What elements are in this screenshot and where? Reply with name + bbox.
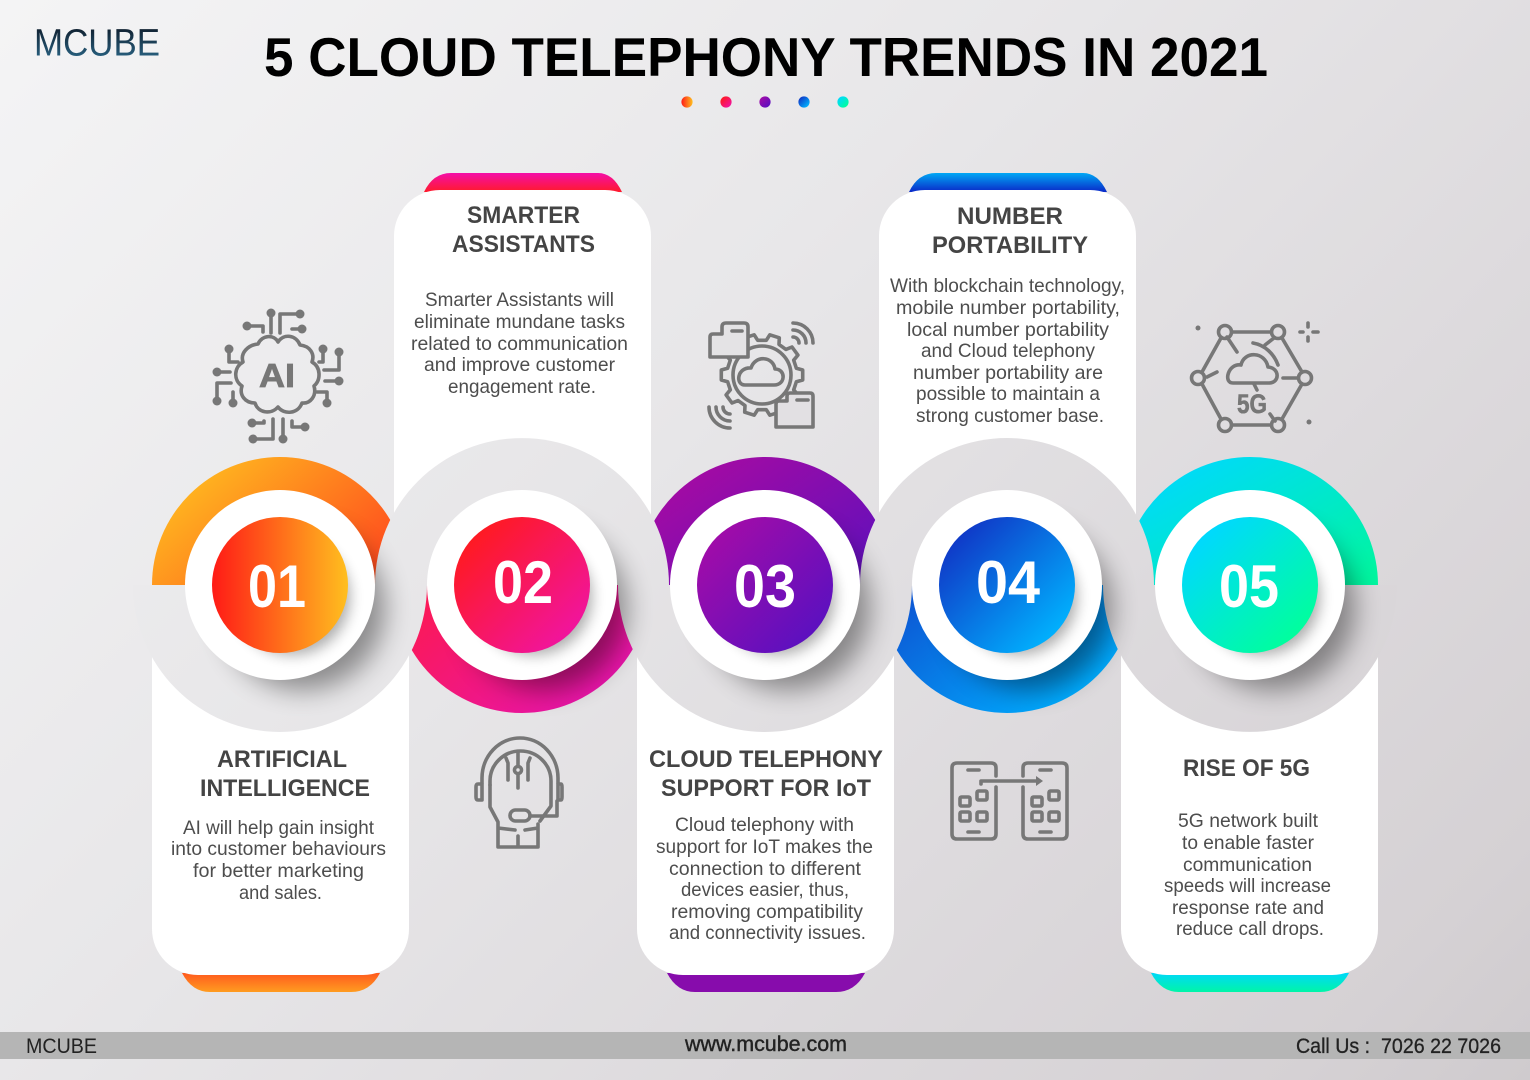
footer bar [0, 1032, 1530, 1059]
panel: cloud telephony support for IoT [637, 585, 894, 992]
text: artificial intelligence body: into customer behaviours [171, 838, 386, 860]
heading: rise of 5G: RISE OF 5G [1183, 755, 1310, 782]
text: cloud telephony body: removing compatibility [671, 901, 863, 923]
text: rise of 5G body: 5G network built [1178, 810, 1319, 832]
text: rise of 5G body [1164, 810, 1331, 940]
node 04: 04 [976, 549, 1041, 616]
text: cloud telephony body: support for IoT makes the [656, 836, 873, 858]
icon: cloud gear [709, 323, 813, 428]
heading: number portability: PORTABILITY [932, 232, 1088, 259]
coloured arcs [152, 457, 1378, 713]
node 01: 01 [248, 553, 306, 620]
text: number portability body: strong customer base. [916, 405, 1104, 427]
panel: rise of 5G [1121, 585, 1378, 992]
text: cloud telephony body: and connectivity issues. [669, 922, 866, 944]
icon: AI brain: AI [259, 357, 295, 394]
panel: smarter assistants [394, 173, 651, 585]
text: number portability body: With blockchain technology, [890, 275, 1125, 297]
text: artificial intelligence body: and sales. [239, 882, 322, 904]
footer: phone: Call Us : 7026 22 7026 [1296, 1035, 1501, 1058]
logo: MCUBE: MCUBE [34, 22, 160, 64]
icon: 5G network [1192, 323, 1318, 432]
text: cloud telephony body: devices easier, thus, [681, 879, 849, 901]
node 05: 05 [1219, 553, 1279, 620]
text: number portability body: mobile number portability, [896, 297, 1120, 319]
text: rise of 5G body: reduce call drops. [1176, 918, 1324, 940]
icon: phones number transfer [952, 763, 1067, 839]
text: smarter assistants body: engagement rate. [448, 376, 596, 398]
text: rise of 5G body: to enable faster [1182, 832, 1314, 854]
text: number portability body: and Cloud telephony [921, 340, 1095, 362]
heading: artificial intelligence [200, 746, 370, 802]
text: smarter assistants body: and improve customer [424, 354, 615, 376]
text: cloud telephony body [656, 814, 873, 944]
text: rise of 5G body: response rate and [1172, 897, 1324, 919]
text: number portability body: number portability are [913, 362, 1103, 384]
text: smarter assistants body: Smarter Assistants will [425, 289, 614, 311]
node 02: 02 [493, 549, 553, 616]
heading: number portability [932, 203, 1088, 259]
icon: 5G network: 5G [1237, 389, 1267, 419]
text: smarter assistants body: eliminate mundane tasks [414, 311, 625, 333]
text: smarter assistants body: related to communication [411, 333, 628, 355]
panel: artificial intelligence [152, 585, 409, 992]
text: cloud telephony body: Cloud telephony with [675, 814, 854, 836]
text: smarter assistants body [411, 289, 628, 398]
title: 5 CLOUD TELEPHONY TRENDS IN 2021 [264, 26, 1268, 88]
node 03: 03 [734, 553, 796, 620]
node 05 [1155, 490, 1355, 690]
heading: smarter assistants [452, 202, 595, 258]
node 02 [427, 490, 627, 690]
heading: cloud telephony support for IoT [649, 746, 883, 802]
text: cloud telephony body: connection to different [669, 858, 862, 880]
text: rise of 5G body: communication [1183, 854, 1312, 876]
node 01 [185, 490, 385, 690]
heading: cloud telephony support for IoT: SUPPORT FOR IoT [661, 775, 871, 802]
footer: website: www.mcube.com [684, 1033, 847, 1056]
icon: headset agent [476, 738, 562, 847]
text: artificial intelligence body: for better marketing [193, 860, 364, 882]
text: artificial intelligence body [171, 817, 386, 904]
panel: number portability [879, 173, 1136, 585]
icon: AI brain [212, 308, 344, 444]
text: number portability body [890, 275, 1125, 427]
heading: artificial intelligence: ARTIFICIAL [217, 746, 347, 773]
heading: cloud telephony support for IoT: CLOUD TELEPHONY [649, 746, 883, 773]
footer: brand: MCUBE [26, 1035, 97, 1058]
text: artificial intelligence body: AI will help gain insight [183, 817, 375, 839]
heading: smarter assistants: ASSISTANTS [452, 231, 595, 258]
title dots [681, 96, 849, 108]
node 03 [670, 490, 870, 690]
grey halos [133, 438, 1397, 732]
text: number portability body: possible to maintain a [916, 383, 1100, 405]
text: rise of 5G body: speeds will increase [1164, 875, 1331, 897]
heading: smarter assistants: SMARTER [467, 202, 580, 229]
text: number portability body: local number portability [907, 319, 1109, 341]
heading: number portability: NUMBER [957, 203, 1063, 230]
node 04 [912, 490, 1112, 690]
heading: artificial intelligence: INTELLIGENCE [200, 775, 370, 802]
